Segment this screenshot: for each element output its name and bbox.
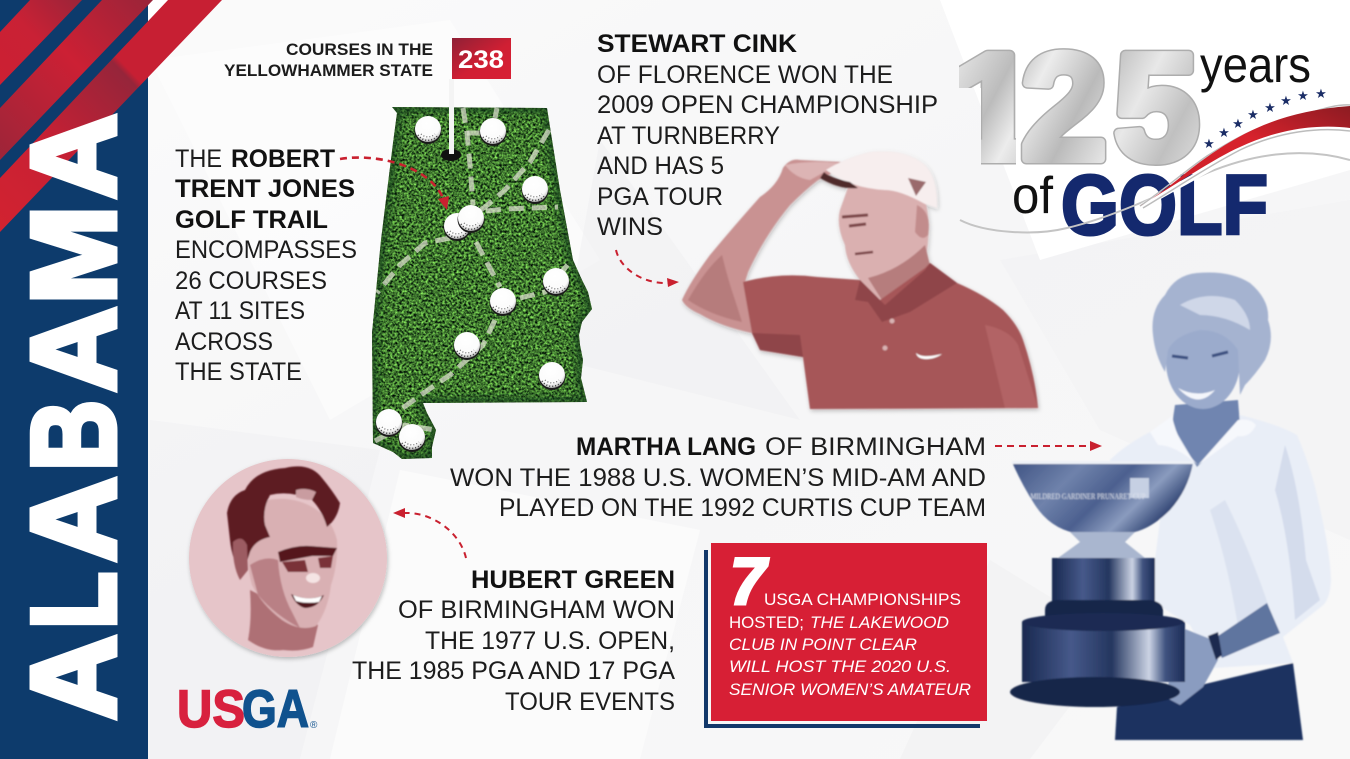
callout text: SENIOR WOMEN’S AMATEUR [729, 680, 971, 699]
text: Stewart Cink: AND HAS 5 [597, 152, 724, 180]
stars: ★ [1203, 136, 1215, 151]
flag: 238 courses: 238 [458, 46, 504, 74]
number 125 fill: 2 [1021, 22, 1107, 191]
photo: Stewart Cink [682, 151, 1038, 409]
pants [1115, 663, 1303, 740]
golf balls [376, 116, 570, 452]
photo: Martha Lang with trophy [1010, 272, 1331, 740]
callout text: CLUB IN POINT CLEAR [729, 635, 917, 654]
text: Robert Trent Jones Golf Trail: ACROSS [175, 328, 273, 356]
stars: ★ [1315, 86, 1327, 101]
text: Stewart Cink: 2009 OPEN CHAMPIONSHIP [597, 91, 938, 119]
ear [233, 539, 248, 580]
number 125 outline: 2 [1021, 22, 1107, 191]
arm [682, 160, 842, 333]
big number 7: 7 [730, 544, 769, 618]
state name: ALABAMA: L [8, 572, 140, 629]
stars: ★ [1218, 125, 1230, 140]
number 125 fill [959, 50, 1199, 164]
state name: ALABAMA: A [8, 635, 140, 720]
text: Martha Lang: WON THE 1988 U.S. WOMEN’S MID-AM AND [450, 464, 986, 492]
stars: ★ [1232, 116, 1244, 131]
stars: ★ [1264, 100, 1276, 115]
number 125 outline: 5 [1114, 22, 1199, 191]
neck [1172, 400, 1240, 467]
callout text: HOSTED; [729, 613, 804, 632]
shirt [743, 263, 1038, 409]
eyes and brows [278, 546, 337, 562]
collar [1150, 416, 1198, 465]
courses caption [224, 41, 433, 80]
logo: USGA: GA [242, 680, 309, 739]
callout text [729, 590, 971, 699]
text: Stewart Cink: AT TURNBERRY [597, 122, 780, 150]
map shape [372, 107, 592, 459]
neck and head [839, 182, 935, 312]
text: Martha Lang: OF BIRMINGHAM [765, 433, 986, 461]
number 125 fill: 1 [948, 22, 1040, 191]
callout text: WILL HOST THE 2020 U.S. [729, 657, 951, 676]
courses caption: COURSES IN THE [286, 41, 433, 59]
text: Hubert Green: THE 1985 PGA AND 17 PGA [352, 657, 675, 685]
text: Robert Trent Jones Golf Trail [175, 145, 357, 386]
eyes [1172, 352, 1228, 358]
text: Robert Trent Jones Golf Trail: THE STATE [175, 358, 302, 386]
state name: ALABAMA: A [8, 477, 140, 562]
trail: dashed paths [375, 108, 570, 441]
word: of: of [1012, 167, 1054, 225]
text: Robert Trent Jones Golf Trail: 26 COURSES [175, 267, 327, 295]
text: Martha Lang: PLAYED ON THE 1992 CURTIS CUP TEAM [499, 494, 986, 522]
courses caption: YELLOWHAMMER STATE [224, 62, 433, 80]
smile [1178, 388, 1215, 400]
word: years: years [1200, 37, 1311, 93]
arrow: to golf trail [340, 158, 449, 210]
cap [826, 151, 937, 208]
text: Martha Lang [450, 433, 986, 522]
callout: 7 USGA championships [704, 543, 987, 728]
text: Hubert Green: HUBERT GREEN [471, 566, 675, 594]
text: Robert Trent Jones Golf Trail: AT 11 SITES [175, 297, 305, 325]
arrow: to Stewart Cink [616, 250, 679, 287]
logo: 125 years of golf [959, 48, 1350, 236]
face [248, 499, 337, 628]
text: Martha Lang: MARTHA LANG [576, 433, 756, 461]
text: Hubert Green [352, 566, 675, 716]
arrow: to Hubert Green [393, 508, 466, 558]
stars: ★ [1247, 107, 1259, 122]
flag: 238 courses [449, 38, 511, 154]
text: Stewart Cink: OF FLORENCE WON THE [597, 61, 893, 89]
callout text: THE LAKEWOOD [810, 613, 949, 632]
text: Stewart Cink: STEWART CINK [597, 30, 797, 58]
state name: ALABAMA: A [8, 307, 140, 392]
sweater [1110, 415, 1331, 668]
face details [842, 215, 868, 217]
text: Stewart Cink: PGA TOUR [597, 183, 723, 211]
trophy [1010, 461, 1193, 707]
trophy inscription: MILDRED GARDINER PRUNARET CUP [1030, 492, 1146, 501]
hair [226, 465, 341, 560]
nose [306, 573, 320, 583]
photo: Hubert Green portrait [189, 459, 387, 657]
neck [248, 590, 318, 651]
stars [1203, 86, 1327, 151]
word: GOLF: GOLF [1061, 158, 1268, 252]
logo on shirt [916, 353, 942, 359]
text: Stewart Cink: WINS [597, 213, 663, 241]
text: Robert Trent Jones Golf Trail: THE [175, 145, 222, 173]
text: Robert Trent Jones Golf Trail: ROBERT [231, 145, 335, 173]
text: Stewart Cink [597, 30, 938, 241]
map edge shading [372, 107, 592, 459]
text: Hubert Green: OF BIRMINGHAM WON [398, 596, 675, 624]
side band: navy panel with red stripes [0, 0, 222, 759]
logo: USGA [177, 680, 318, 739]
state name: ALABAMA: B [8, 400, 140, 471]
forearm and hands [1212, 603, 1280, 658]
state name: ALABAMA: A [8, 114, 140, 199]
state name: ALABAMA: M [8, 206, 140, 304]
arrow: to Martha Lang [995, 441, 1102, 451]
text: Robert Trent Jones Golf Trail: GOLF TRAIL [175, 206, 328, 234]
number 125 outline [959, 48, 1200, 166]
text: Hubert Green: TOUR EVENTS [505, 688, 675, 716]
number 125 outline: 1 [948, 22, 1040, 191]
text: Robert Trent Jones Golf Trail: ENCOMPASSES [175, 236, 357, 264]
number 125 fill: 5 [1114, 22, 1199, 191]
stars: ★ [1280, 93, 1292, 108]
text: Hubert Green: THE 1977 U.S. OPEN, [425, 627, 675, 655]
callout text: USGA CHAMPIONSHIPS [764, 590, 961, 609]
hair [1152, 272, 1271, 395]
swoosh [960, 105, 1350, 232]
icon: flag hole [441, 149, 461, 161]
face [1166, 315, 1240, 409]
text: Robert Trent Jones Golf Trail: TRENT JONES [175, 175, 355, 203]
logo: USGA: ® [310, 720, 318, 731]
stars: ★ [1297, 88, 1309, 103]
map: Alabama state in grass with golf trail [372, 107, 592, 459]
smile [291, 594, 324, 608]
logo: USGA: US [177, 680, 245, 739]
